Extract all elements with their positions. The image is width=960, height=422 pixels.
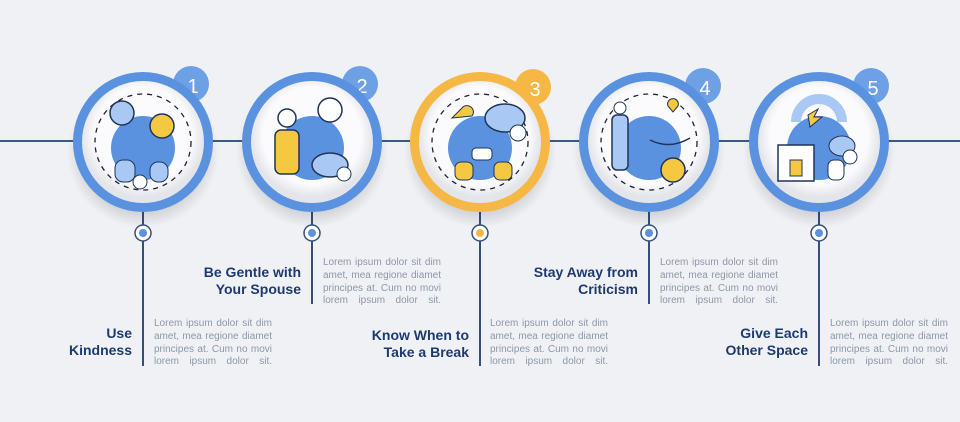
step 1 text: lorem ipsum dolor sit. xyxy=(154,356,272,367)
step 2 text: lorem ipsum dolor sit. xyxy=(323,295,441,306)
step 4 text: principes at. Cum no movi xyxy=(660,283,778,294)
step 5 text: amet, mea regione diamet xyxy=(830,331,948,342)
step 4 title: Criticism xyxy=(578,281,638,297)
circle 2 xyxy=(236,66,388,228)
step 1 title: Use xyxy=(106,325,132,341)
step 3 title xyxy=(372,327,469,360)
step 5 title xyxy=(726,325,808,358)
step 2 title: Be Gentle with xyxy=(204,264,301,280)
step 2 text: principes at. Cum no movi xyxy=(323,283,441,294)
step 1 title: Kindness xyxy=(69,342,132,358)
step 4 text xyxy=(660,257,778,306)
step 4 title xyxy=(534,264,638,297)
circle 1: 1 xyxy=(187,76,199,98)
step 5 text: principes at. Cum no movi xyxy=(830,344,948,355)
circle 2: 2 xyxy=(356,76,368,98)
step 2 text xyxy=(323,257,441,306)
step 4 text: amet, mea regione diamet xyxy=(660,270,778,281)
step 2 title: Your Spouse xyxy=(216,281,301,297)
step 5 text: lorem ipsum dolor sit. xyxy=(830,356,948,367)
circle 1 xyxy=(67,66,219,228)
step 2 text: amet, mea regione diamet xyxy=(323,270,441,281)
dots xyxy=(135,225,827,241)
horizontal timeline xyxy=(0,140,960,142)
step 1 title xyxy=(69,325,132,358)
circle 5 xyxy=(743,68,895,228)
step 4 text: lorem ipsum dolor sit. xyxy=(660,295,778,306)
step 2 title xyxy=(204,264,301,297)
step 1 text: amet, mea regione diamet xyxy=(154,331,272,342)
step 3 text xyxy=(490,318,608,367)
step 2 text: Lorem ipsum dolor sit dim xyxy=(323,257,441,268)
step 5 title: Give Each xyxy=(740,325,808,341)
step 1 text: principes at. Cum no movi xyxy=(154,344,272,355)
step 3 text: amet, mea regione diamet xyxy=(490,331,608,342)
step 3 text: principes at. Cum no movi xyxy=(490,344,608,355)
circle 3: 3 xyxy=(529,79,541,101)
step 3 text: Lorem ipsum dolor sit dim xyxy=(490,318,608,329)
step 3 title: Take a Break xyxy=(384,344,469,360)
circle 4: 4 xyxy=(699,78,711,100)
step 5 title: Other Space xyxy=(726,342,808,358)
circle 3 xyxy=(404,69,556,228)
step 3 title: Know When to xyxy=(372,327,469,343)
step 3 text: lorem ipsum dolor sit. xyxy=(490,356,608,367)
circle 4 xyxy=(573,68,725,228)
step 4 title: Stay Away from xyxy=(534,264,638,280)
step 1 text xyxy=(154,318,272,367)
step 5 text xyxy=(830,318,948,367)
circle 5: 5 xyxy=(867,78,879,100)
step 4 text: Lorem ipsum dolor sit dim xyxy=(660,257,778,268)
step 1 text: Lorem ipsum dolor sit dim xyxy=(154,318,272,329)
step 5 text: Lorem ipsum dolor sit dim xyxy=(830,318,948,329)
